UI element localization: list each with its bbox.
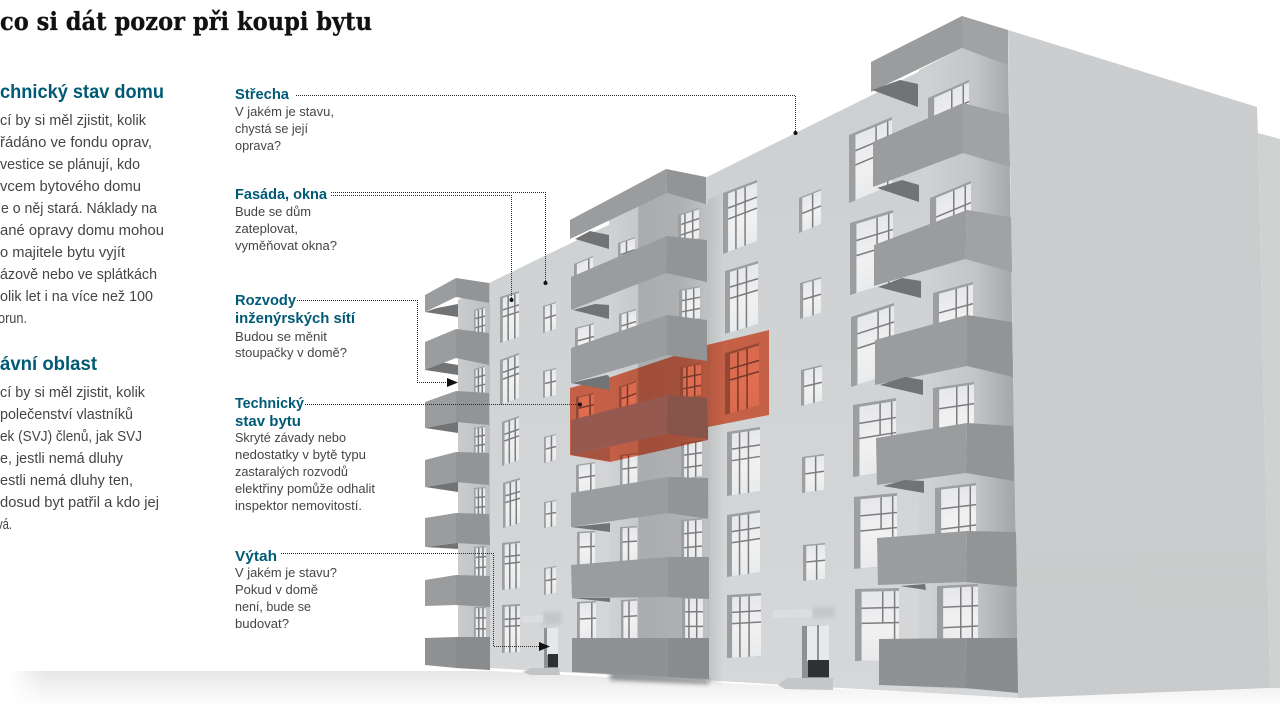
windows: right balcony doors [928,80,978,646]
entrance left with canopy, door and step [522,612,562,675]
callout: Výtah: není, bude se [235,599,311,614]
arrow: Rozvody inženýrských sítí [297,300,458,387]
callout: Technický stav bytu: Skryté závady nebo [235,430,346,445]
windows: left staircase column [543,302,556,595]
callout: Výtah: Výtah [235,549,277,565]
text block: správní oblast: estli nemá dluhy ten, [0,473,133,489]
leader lines: Fasáda, okna [331,192,548,302]
arrow: Výtah [281,554,550,651]
text block: technický stav domu: o majitele bytu vyjít [0,245,125,261]
callout: Fasáda, okna: zateplovat, [235,221,298,236]
left pier balconies [425,278,490,670]
entrance right with canopy, door and step [773,607,835,690]
callout: Technický stav bytu: elektřiny pomůže odhalit [235,481,375,496]
text block: správní oblast: ek (SVJ) členů, jak SVJ [0,429,142,445]
callout: Rozvody inženýrských sítí: inženýrských sítí [235,311,356,327]
callout: Střecha: chystá se její [235,121,308,136]
building side wall [1008,30,1280,698]
callout: Technický stav bytu: stav bytu [235,414,301,430]
callout: Technický stav bytu: zastaralých rozvodů [235,464,348,479]
text block: technický stav domu: cí by si měl zjistit, kolik [0,113,147,129]
text block: technický stav domu: řádáno ve fondu oprav, [0,135,152,151]
windows: column of tall windows centre [723,180,761,658]
highlighted flat: red wall overlay [570,330,769,462]
panel: správní oblast [0,354,159,533]
callout: Střecha [235,87,334,153]
text block: správní oblast: e, jestli nemá dluhy [0,451,124,467]
panel: technický stav domu [0,82,164,327]
callout: Fasáda, okna: vyměňovat okna? [235,238,337,253]
text block: správní oblast: dosud byt patřil a kdo jej [0,495,159,511]
title: co si dát pozor při koupi bytu [0,7,372,36]
callout: Technický stav bytu [235,396,375,513]
heading: technický stav domu: chnický stav domu [0,82,164,103]
callout: Technický stav bytu: Technický [235,396,304,412]
centre pier balconies [570,169,709,684]
text block: správní oblast [0,385,159,533]
windows: small staircase column right [799,189,825,581]
text block: technický stav domu: vcem bytového domu [0,179,141,195]
heading: správní oblast: ávní oblast [0,354,98,375]
leader line: Technický stav bytu [305,402,582,406]
callout: Technický stav bytu: inspektor nemovitostí. [235,498,362,513]
ground shadow [0,660,1280,720]
leader line: Střecha [296,96,798,135]
windows: tall column beside right balconies [849,117,899,661]
callout: Střecha: Střecha [235,87,290,103]
balcony recess walls [458,48,1018,690]
callout: Rozvody inženýrských sítí: Budou se měnit [235,329,327,344]
callout: Rozvody inženýrských sítí: stoupačky v domě? [235,345,347,360]
callout: Technický stav bytu: nedostatky v bytě typu [235,447,366,462]
callout: Střecha: oprava? [235,138,281,153]
windows: left balcony bay [474,307,486,638]
highlighted flat: red balcony [571,395,708,461]
text block: technický stav domu: olik let i na více než 100 [0,289,153,305]
callout: Fasáda, okna: Fasáda, okna [235,187,328,203]
callout: Fasáda, okna: Bude se dům [235,204,311,219]
callout: Výtah [235,549,337,631]
callout: Rozvody inženýrských sítí: Rozvody [235,293,296,309]
text block: technický stav domu: vestice se plánují, kdo [0,157,140,173]
right pier balconies [871,16,1018,693]
windows: centre balcony bays [574,208,703,640]
windows: left tall column [500,291,520,653]
text block: správní oblast: cí by si měl zjistit, kolik [0,385,146,401]
text block: technický stav domu [0,113,164,327]
callout: Rozvody inženýrských sítí [235,293,356,360]
text block: technický stav domu: ané opravy domu mohou [0,223,164,239]
callout: Střecha: V jakém je stavu, [235,104,334,119]
text block: technický stav domu: e o něj stará. Náklady na [1,201,158,217]
callout: Fasáda, okna [235,187,337,253]
callout: Výtah: Pokud v domě [235,582,318,597]
front facade wall [489,40,1018,698]
text block: správní oblast: polečenství vlastníků [0,407,133,423]
illustration: apartment building [425,16,1280,698]
callout: Výtah: budovat? [235,616,289,631]
callout: Výtah: V jakém je stavu? [235,565,337,580]
text block: technický stav domu: ázově nebo ve splátkách [0,267,157,283]
